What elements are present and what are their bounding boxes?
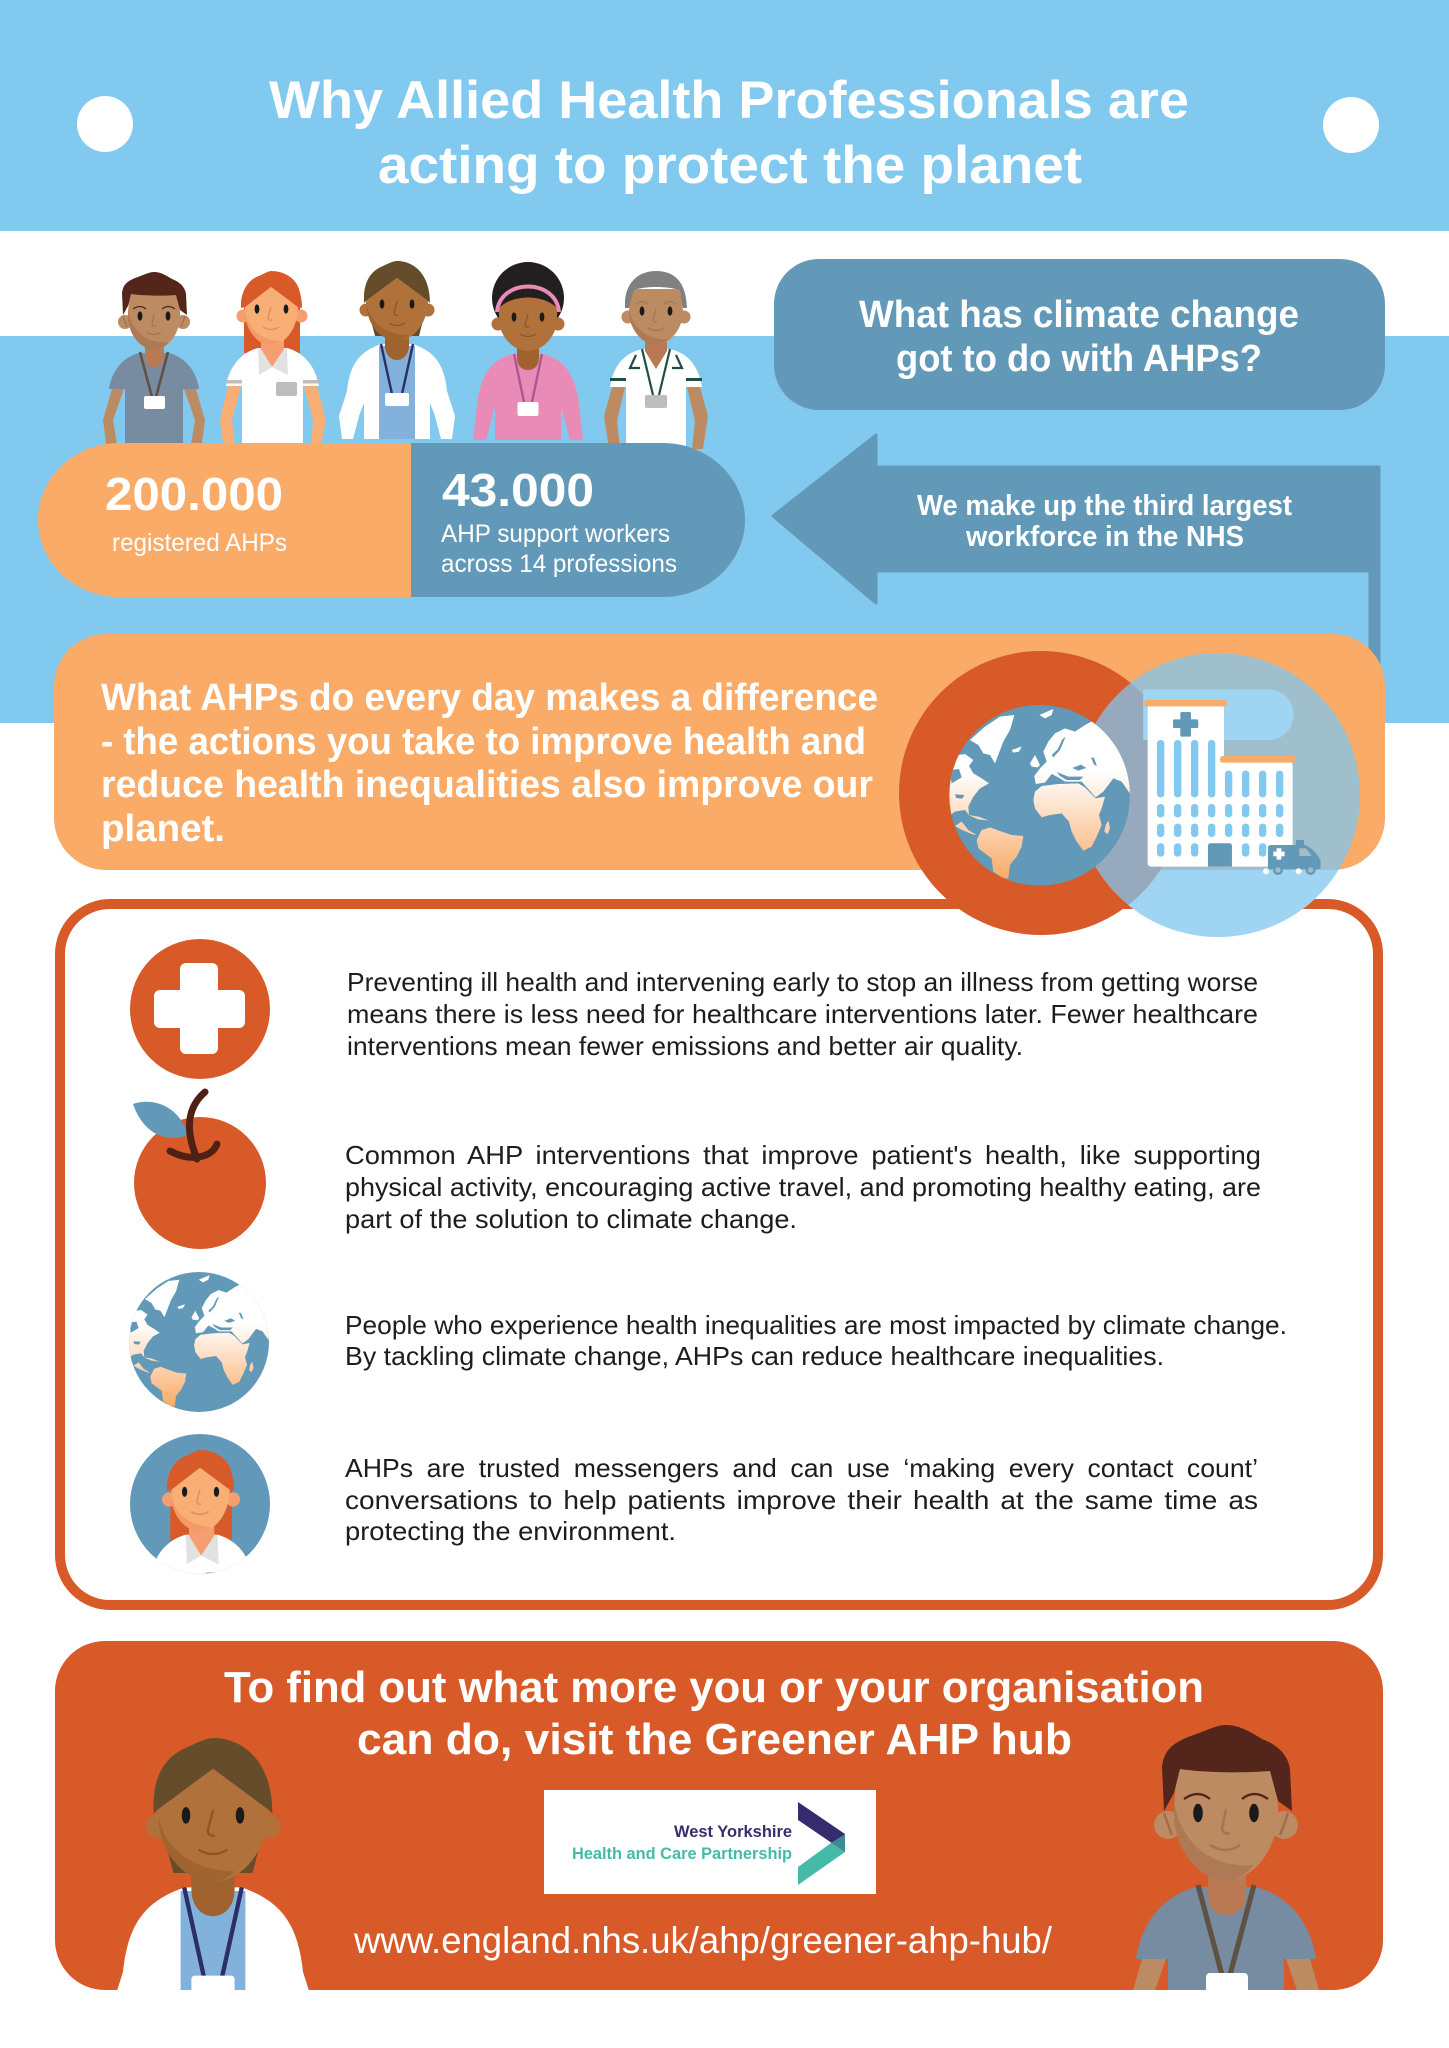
- stat: support workers: [411, 443, 745, 597]
- text: trusted messengers: AHPs are trusted messengers and can use ‘making every contact count’: [345, 1453, 1258, 1483]
- arrow: third largest workforce: We make up the third largest: [917, 490, 1292, 522]
- arrow: third largest workforce: [773, 435, 1379, 690]
- text: trusted messengers: conversations to help patients improve their health at the same time as: [345, 1485, 1258, 1515]
- icon: orange ring: [899, 651, 1183, 935]
- text: common interventions: physical activity, encouraging active travel, and promoting healthy eating, are: [345, 1172, 1261, 1202]
- text: common interventions: [345, 1140, 1261, 1234]
- stat: support workers: across 14 professions: [441, 550, 677, 578]
- panel: daily difference banner: [54, 634, 1385, 870]
- arrow: third largest workforce: workforce in the NHS: [965, 521, 1244, 553]
- icon: hospital in blue circle: [1076, 653, 1360, 937]
- panel: question box: What has climate change: [859, 294, 1299, 336]
- title: Why Allied Health Professionals are: [269, 71, 1189, 130]
- text: trusted messengers: [345, 1453, 1258, 1546]
- character: woman in white coat: [339, 261, 455, 439]
- stat: support workers: AHP support workers: [441, 520, 670, 548]
- logo: West Yorkshire Health and Care Partnership: Health and Care Partnership: [572, 1844, 792, 1863]
- text: common interventions: part of the solution to climate change.: [345, 1204, 797, 1234]
- character: woman in white coat, large: [117, 1738, 309, 1990]
- text: common interventions: Common AHP interventions that improve patient's health, like supporting: [345, 1140, 1261, 1170]
- text: health inequalities: By tackling climate change, AHPs can reduce healthcare inequalities.: [345, 1341, 1164, 1371]
- panel: daily difference banner: planet.: [101, 808, 225, 850]
- header dot left: [77, 96, 133, 152]
- icon: globe: [948, 705, 1131, 886]
- heading: find out more: To find out what more you or your organisation: [224, 1663, 1204, 1712]
- character: man in white tunic: [604, 271, 708, 449]
- character: man in grey scrubs, large: [1133, 1725, 1319, 1990]
- text: preventing ill health: means there is less need for healthcare interventions later. Fewer healthcare: [347, 999, 1258, 1029]
- character: woman with orange hair: [220, 271, 326, 449]
- blue background band: [0, 336, 1449, 723]
- text: health inequalities: People who experience health inequalities are most impacted by climate change.: [345, 1310, 1287, 1340]
- group of five AHP characters: [103, 261, 708, 450]
- logo: West Yorkshire Health and Care Partnership: West Yorkshire: [674, 1822, 792, 1841]
- stat: registered AHPs: 200.000: [105, 468, 283, 520]
- panel: question box: got to do with AHPs?: [896, 338, 1262, 380]
- header band: [0, 0, 1449, 231]
- panel: daily difference banner: What AHPs do every day makes a difference: [101, 677, 878, 719]
- stat: registered AHPs: [38, 443, 411, 597]
- icon: apple: [133, 1092, 266, 1249]
- stat: support workers: 43.000: [442, 464, 594, 516]
- icon: AHP portrait: [130, 1434, 270, 1574]
- link: hub URL: www.england.nhs.uk/ahp/greener-ahp-hub/: [353, 1920, 1053, 1961]
- title: [269, 71, 1189, 195]
- logo: West Yorkshire Health and Care Partnership: [544, 1790, 876, 1894]
- panel: question box: [774, 259, 1385, 410]
- header dot right: [1323, 97, 1379, 153]
- text: health inequalities: [345, 1310, 1287, 1371]
- text: preventing ill health: [347, 967, 1258, 1061]
- panel: daily difference banner: - the actions you take to improve health and: [101, 721, 866, 763]
- text: preventing ill health: Preventing ill health and intervening early to stop an illness from getting worse: [347, 967, 1258, 997]
- stat: registered AHPs: registered AHPs: [112, 529, 287, 557]
- text: preventing ill health: interventions mean fewer emissions and better air quality.: [347, 1031, 1023, 1061]
- text: trusted messengers: protecting the environment.: [345, 1516, 676, 1546]
- title: acting to protect the planet: [378, 136, 1082, 195]
- heading: find out more: can do, visit the Greener AHP hub: [357, 1715, 1072, 1764]
- icon: small globe: [128, 1272, 270, 1412]
- character: man in grey scrubs: [103, 272, 205, 450]
- icon: medical cross: [130, 939, 270, 1079]
- panel: key points frame: [60, 904, 1378, 1605]
- character: woman in pink: [473, 262, 583, 440]
- heading: find out more: [224, 1663, 1204, 1764]
- panel: call to action: [55, 1641, 1383, 1990]
- panel: daily difference banner: reduce health inequalities also improve our: [101, 764, 873, 806]
- stat pill: [38, 443, 745, 597]
